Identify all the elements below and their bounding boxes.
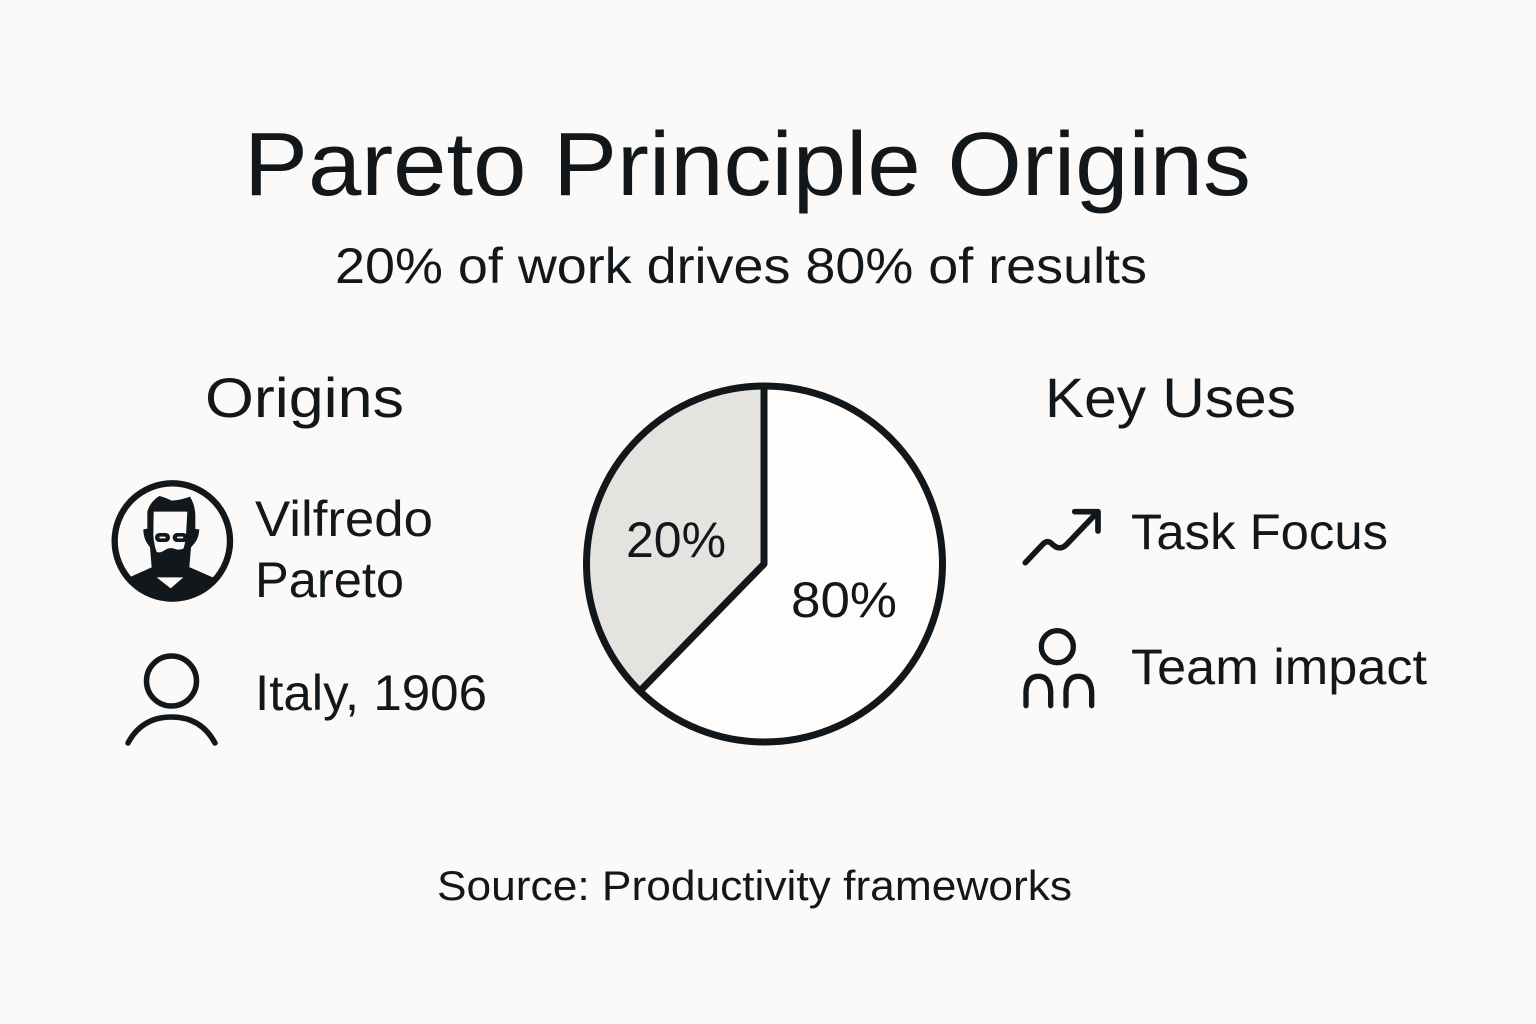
text: Vilfredo Pareto: Vilfredo xyxy=(255,491,433,547)
pie chart xyxy=(586,386,945,742)
icon: trending arrow xyxy=(1025,512,1098,563)
text: Team impact: Team impact xyxy=(1131,639,1427,695)
label: 20%: 20% xyxy=(626,512,726,568)
text: Task Focus: Task Focus xyxy=(1131,504,1388,560)
heading: key uses: Key Uses xyxy=(1045,366,1296,429)
text: Vilfredo Pareto xyxy=(255,491,433,608)
icon: person xyxy=(128,656,215,743)
heading: origins: Origins xyxy=(205,366,404,429)
panel: key uses xyxy=(1025,366,1427,706)
title: Pareto Principle Origins xyxy=(244,115,1251,215)
slice: 20% xyxy=(589,386,764,690)
text: Italy, 1906: Italy, 1906 xyxy=(255,665,487,721)
source note: Source: Productivity frameworks xyxy=(437,862,1072,909)
label: 80%: 80% xyxy=(791,572,897,628)
subtitle: 20% of work drives 80% of results xyxy=(335,238,1147,294)
icon: team xyxy=(1026,631,1092,706)
panel: origins xyxy=(115,366,487,743)
text: Vilfredo Pareto: Pareto xyxy=(255,552,404,608)
icon: Vilfredo Pareto portrait xyxy=(115,483,230,603)
slice: 80% xyxy=(641,386,945,742)
